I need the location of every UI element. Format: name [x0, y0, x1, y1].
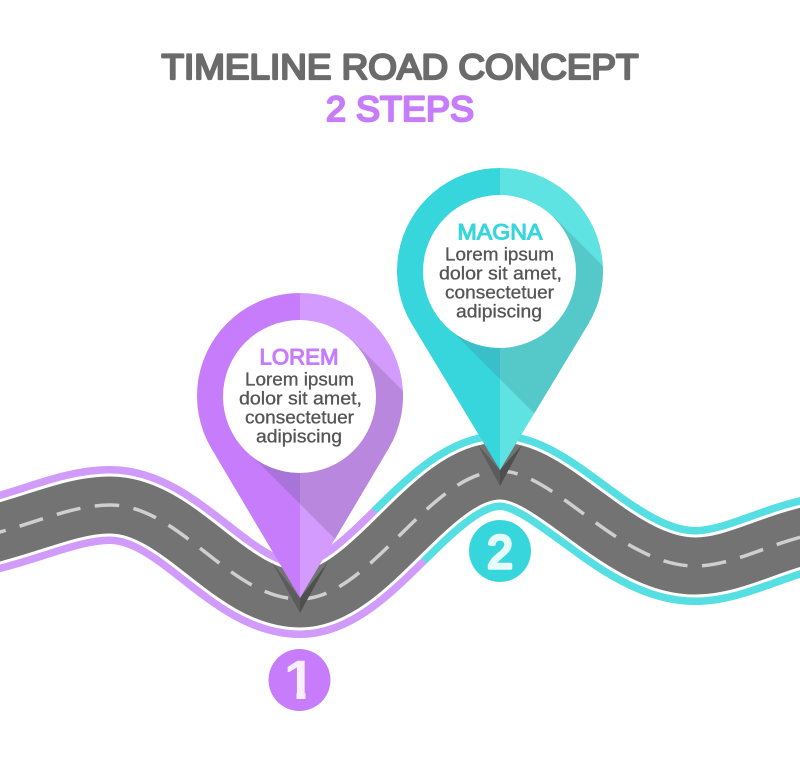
road centre dashes [0, 471, 800, 599]
road border: teal section [372, 434, 800, 605]
body text: Lorem ipsum [245, 370, 354, 390]
body text [439, 244, 562, 322]
white label circle [423, 195, 576, 348]
road white edge [0, 471, 800, 599]
body text: dolor sit amet, [239, 388, 362, 408]
step badge 1: 1 [284, 648, 315, 711]
heading: LOREM [260, 344, 338, 370]
title: TIMELINE ROAD CONCEPT [162, 47, 638, 87]
body text: adipiscing [256, 426, 342, 446]
pin 2: magna [397, 168, 603, 470]
road asphalt [0, 471, 800, 599]
body text: Lorem ipsum [445, 244, 554, 264]
pin 1: lorem [197, 293, 403, 598]
pin 2 shadow on road [478, 445, 522, 486]
road [0, 471, 800, 599]
step badge 1 [268, 648, 330, 711]
heading: MAGNA [458, 220, 543, 244]
title [162, 47, 638, 129]
body text: consectetuer [445, 282, 554, 302]
body text: consectetuer [245, 408, 354, 428]
white label circle [223, 320, 376, 473]
step badge 2: 2 [487, 526, 513, 578]
body text: adipiscing [456, 302, 542, 322]
body text: dolor sit amet, [439, 264, 562, 284]
subtitle: 2 STEPS [326, 89, 474, 129]
body text [239, 370, 362, 446]
pin 1 shadow on road [272, 562, 328, 613]
road border: purple section [0, 466, 430, 638]
step badge 2 [469, 520, 531, 582]
